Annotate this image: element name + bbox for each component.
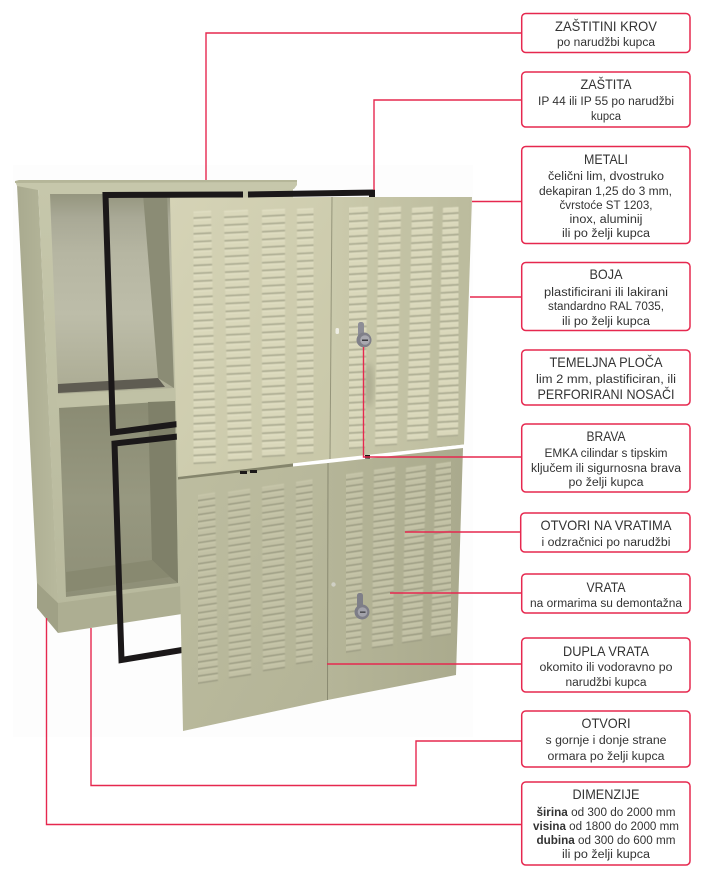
description: s gornje i donje strane [546, 735, 666, 747]
callout: boja [522, 262, 690, 330]
callout: temeljna ploča [522, 350, 690, 405]
leader line: otvori na vratima [405, 531, 521, 533]
louvers: upper left leaf [199, 208, 308, 464]
door gap shadow [178, 464, 293, 480]
heading: BRAVA [586, 428, 626, 444]
second heading: PERFORIRANI NOSAČI [538, 386, 674, 402]
lower door [178, 448, 463, 731]
description [538, 96, 674, 123]
upper lock [356, 322, 372, 348]
box outline [522, 72, 690, 127]
box outline [522, 711, 690, 767]
upper compartment [50, 194, 174, 394]
heading: VRATA [586, 579, 626, 595]
description [539, 171, 672, 240]
callout: brava [522, 424, 690, 492]
callout: zaštitini krov [522, 14, 690, 52]
description: IP 44 ili IP 55 po narudžbi [538, 96, 674, 108]
heading: DIMENZIJE [572, 786, 640, 802]
lower door knob [331, 582, 336, 587]
heading: ZAŠTITA [580, 76, 632, 92]
description: narudžbi kupca [566, 677, 647, 689]
description: ili po želji kupca [562, 228, 651, 240]
heading: ZAŠTITINI KROV [555, 18, 658, 34]
cabinet left side [17, 185, 58, 604]
box outline [522, 350, 690, 405]
cabinet base [37, 583, 182, 633]
leader line: zaštitini krov [206, 33, 521, 180]
box outline [522, 262, 690, 330]
box outline [522, 574, 690, 613]
description: ključem ili sigurnosna brava [531, 463, 682, 475]
louvers: upper right leaf [354, 207, 454, 449]
top roof cap [15, 180, 297, 190]
lower door gasket [114, 436, 182, 660]
lower lock [354, 593, 370, 620]
callout: metali [522, 146, 690, 244]
leader line: boja [470, 296, 521, 298]
description: po narudžbi kupca [557, 37, 656, 49]
gasket clip bits [240, 455, 370, 474]
leader line: dimenzije [46, 618, 521, 824]
callout: otvori [522, 711, 690, 767]
description: okomito ili vodoravno po [540, 662, 672, 674]
description: visina od 1800 do 2000 mm [533, 821, 679, 833]
callout: zaštita [522, 72, 690, 127]
lower compartment [59, 401, 178, 597]
description [544, 287, 668, 328]
description: ili po želji kupca [562, 849, 651, 861]
description: dekapiran 1,25 do 3 mm, [539, 186, 672, 198]
box outline [522, 14, 690, 52]
description: i odzračnici po narudžbi [542, 537, 670, 549]
description: čelični lim, dvostruko [548, 171, 664, 183]
description: na ormarima su demontažna [530, 598, 683, 610]
leader line: dupla vrata [327, 663, 521, 665]
callout: dupla vrata [522, 638, 690, 692]
description: ormara po želji kupca [548, 751, 665, 763]
description: inox, aluminij [570, 214, 642, 226]
upper door gasket [106, 190, 375, 432]
box outline [522, 782, 690, 865]
louvers: lower left leaf [204, 480, 307, 683]
heading: BOJA [590, 266, 623, 282]
box outline [522, 146, 690, 244]
description [531, 448, 682, 489]
leader line: vrata [390, 592, 521, 594]
leader line: metali [472, 200, 521, 202]
description: čvrstoće ST 1203, [560, 200, 652, 212]
box outline [522, 424, 690, 492]
heading: METALI [584, 151, 628, 167]
leader line: zaštita [374, 100, 521, 190]
description: standardno RAL 7035, [548, 301, 664, 313]
louvers: lower right leaf [351, 463, 446, 653]
leader line: otvori [91, 628, 521, 786]
heading: DUPLA VRATA [563, 643, 650, 659]
description: EMKA cilindar s tipskim [544, 448, 668, 460]
callout: otvori na vratima [521, 513, 690, 552]
door gap white stripe [293, 444, 464, 467]
description: kupca [591, 111, 622, 123]
description [540, 662, 672, 689]
description: širina od 300 do 2000 mm [536, 807, 676, 819]
description: po želji kupca [568, 477, 644, 489]
description [533, 807, 679, 861]
middle shelf [56, 390, 175, 407]
upper door [170, 197, 472, 477]
leader line: brava [364, 347, 521, 457]
box outline [521, 513, 690, 552]
callout: vrata [522, 574, 690, 613]
upper door knob [336, 328, 339, 334]
cabinet front frame [38, 187, 293, 610]
box outline [522, 638, 690, 692]
heading: OTVORI NA VRATIMA [540, 517, 672, 533]
description: ili po želji kupca [562, 316, 651, 328]
description [546, 735, 666, 763]
heading: TEMELJNA PLOČA [550, 354, 663, 370]
callout: dimenzije [522, 782, 690, 865]
heading: OTVORI [582, 715, 630, 731]
description: dubina od 300 do 600 mm [536, 835, 676, 847]
cabinet illustration [15, 180, 472, 731]
description: lim 2 mm, plastificiran, ili [536, 374, 676, 386]
description: plastificirani ili lakirani [544, 287, 668, 299]
